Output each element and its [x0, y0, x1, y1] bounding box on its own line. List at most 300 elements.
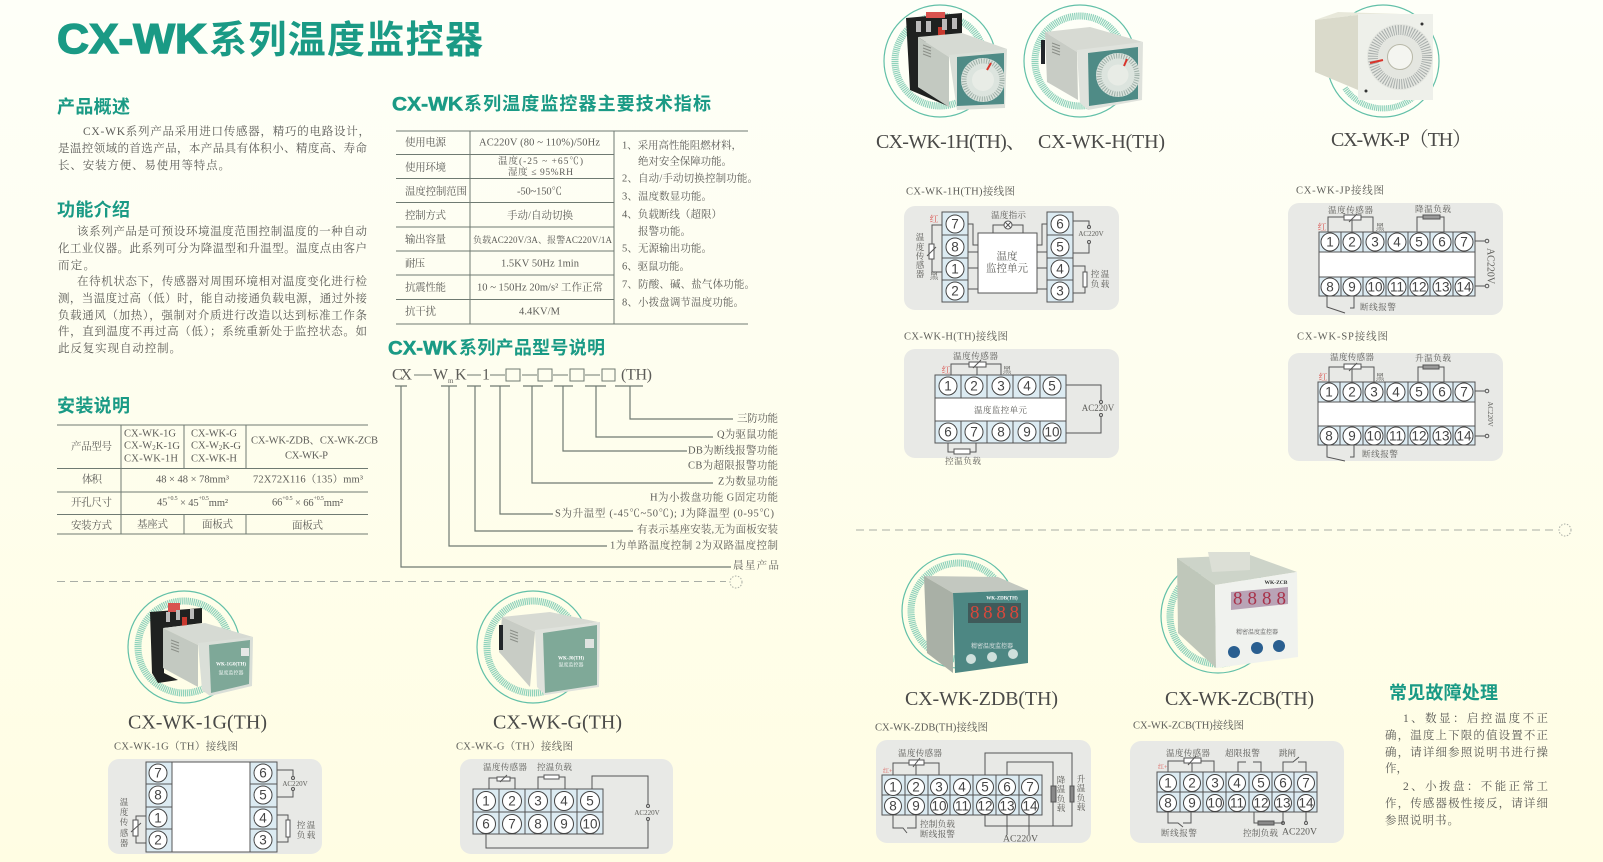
- table: technical specs: 6、驱鼠功能。: [622, 260, 690, 272]
- wiring diagram: ZDB: 载: [1077, 801, 1086, 812]
- heading: model explanation: 系列产品型号说明: [459, 337, 605, 358]
- wiring diagram: 1G: 感: [120, 827, 129, 838]
- wiring diagram: JP: 14: [1456, 280, 1472, 294]
- wiring diagram: 1G: 4: [259, 810, 267, 826]
- wiring diagram: G: 10: [582, 816, 598, 832]
- table: installation: CX-WK-P: [285, 450, 328, 462]
- text block: functions: [58, 224, 368, 355]
- wiring diagram: JP: 断线报警: [1360, 301, 1396, 312]
- wiring diagram: 1H: 8: [951, 240, 959, 254]
- wiring diagram: H: 4: [1023, 378, 1031, 394]
- table: technical specs: 温度(-25 ~ +65℃): [498, 155, 583, 167]
- text block: functions: 此反复实现自动控制。: [58, 341, 181, 355]
- table: installation: 面板式: [292, 518, 324, 532]
- table: installation: +0.5: [313, 496, 324, 502]
- wiring diagram: ZCB: 12: [1253, 796, 1269, 810]
- table: installation: 72X72X116（135）mm³: [253, 474, 363, 486]
- wiring diagram: 1H: 载: [1101, 278, 1110, 289]
- product photo: CX-WK-H: [1024, 5, 1143, 117]
- wiring diagram: 1G: 器: [120, 838, 129, 848]
- model code formula: W: [433, 366, 449, 384]
- wiring diagram: ZCB: 温度传感器: [1166, 747, 1210, 758]
- table: installation: mm²: [324, 498, 343, 508]
- wiring diagram: 1G: 1: [154, 810, 162, 826]
- wiring diagram: 1H: 监控单元: [986, 262, 1028, 274]
- wiring diagram: JP: 黑: [1376, 222, 1385, 232]
- wiring diagram: JP: 1: [1326, 234, 1334, 250]
- wiring diagram: G: 6: [482, 816, 490, 832]
- text block: functions: 测，当温度过高（低）时，能自动接通负载电源，通过外接: [58, 291, 368, 305]
- wiring diagram: SP: 5: [1415, 384, 1423, 400]
- product photo: CX-WK-ZDB: 8888: [970, 602, 1019, 624]
- wiring diagram: 1G: 2: [154, 832, 162, 848]
- wiring diagram: H: 1: [944, 378, 952, 394]
- wiring diagram: H: [904, 349, 1119, 466]
- table: technical specs: 3、温度数显功能。: [622, 190, 712, 202]
- wiring diagram: 1G: 负: [297, 829, 306, 840]
- wiring diagram: 1G: 传: [120, 816, 129, 827]
- product photo: CX-WK-1H: [884, 5, 1007, 117]
- wiring diagram: ZCB: 8: [1164, 796, 1172, 810]
- wiring diagram: SP: [1288, 351, 1503, 461]
- model code legend: H为小拨盘功能 G固定功能: [650, 490, 778, 504]
- wiring diagram: SP: 9: [1348, 428, 1356, 444]
- wiring diagram: 1H: AC220V: [1078, 230, 1104, 238]
- wiring diagram: G: [460, 759, 673, 854]
- table: technical specs: 报警功能。: [638, 224, 691, 238]
- wiring diagram: 1H: [904, 206, 1119, 310]
- heading: model explanation: CX-WK: [388, 338, 457, 360]
- heading: technical specs: [392, 93, 711, 116]
- wiring diagram: 1H: 温: [916, 232, 925, 242]
- table: technical specs: [396, 131, 758, 324]
- text block: product overview: CX-WK系列产品采用进口传感器，精巧的电路设计，: [83, 124, 370, 138]
- table: installation: 66: [272, 498, 282, 508]
- caption: CX-WK-G: CX-WK-G(TH): [493, 712, 622, 734]
- caption: CX-WK-1H / H: CX-WK-1H(TH)、: [876, 131, 1026, 153]
- wiring diagram: ZCB: 跳闸: [1279, 747, 1296, 758]
- table: installation: 2: [219, 444, 223, 452]
- caption: ZDB wiring: CX-WK-ZDB(TH)接线图: [875, 720, 988, 734]
- wiring diagram: ZDB: 12: [977, 798, 993, 814]
- text block: troubleshooting: [1385, 711, 1548, 827]
- table: technical specs: 绝对安全保障功能。: [638, 154, 732, 168]
- product photo: CX-WK-ZCB: WK-ZCB: [1265, 580, 1288, 586]
- wiring diagram: H: 10: [1044, 424, 1060, 440]
- caption: H wiring: CX-WK-H(TH)接线图: [904, 330, 1008, 342]
- wiring diagram: SP: 14: [1456, 428, 1472, 444]
- wiring diagram: H: 6: [944, 424, 952, 440]
- table: installation: K-G: [222, 440, 241, 452]
- product photo: CX-WK-G: [477, 591, 600, 703]
- caption: CX-WK-1G: CX-WK-1G(TH): [128, 712, 267, 734]
- text block: troubleshooting: 确，请详细参照说明书进行操: [1385, 745, 1548, 759]
- wiring diagram: JP: 3: [1371, 234, 1379, 250]
- table: installation: × 45: [178, 498, 199, 508]
- table: technical specs: 使用环境: [405, 160, 446, 174]
- product photo: CX-WK-ZCB: 精密温度监控器: [1236, 628, 1278, 636]
- wiring diagram: ZDB: 9: [912, 798, 920, 814]
- model code legend: 有表示基座安装,无为面板安装: [637, 522, 778, 536]
- wiring diagram: JP: 降温负载: [1415, 203, 1451, 214]
- table: technical specs: 湿度 ≤ 95%RH: [508, 166, 573, 178]
- wiring diagram: ZDB: 14: [1022, 798, 1038, 814]
- wiring diagram: 1G: 5: [259, 788, 267, 802]
- wiring diagram: 1H: 7: [951, 216, 959, 232]
- wiring diagram: ZCB: 14: [1298, 796, 1314, 810]
- wiring diagram: SP: 7: [1460, 384, 1468, 400]
- wiring diagram: SP: 13: [1434, 428, 1450, 444]
- table: installation: mm²: [209, 498, 228, 508]
- product photo: CX-WK-ZDB: WK-ZDB(TH): [986, 596, 1018, 602]
- table: technical specs: 2、自动/手动切换控制功能。: [622, 172, 758, 184]
- model code formula: (TH): [621, 366, 652, 384]
- wiring diagram: SP: 红: [1319, 371, 1328, 382]
- wiring diagram: G: 1: [482, 794, 490, 808]
- model code legend: Q为驱鼠功能: [717, 428, 778, 440]
- table: installation: CX-W: [124, 440, 152, 452]
- wiring diagram: ZDB: 6: [1003, 780, 1011, 794]
- wiring diagram: JP: 2: [1348, 234, 1356, 250]
- wiring diagram: ZDB: AC220V: [1003, 834, 1038, 844]
- table: technical specs: 输出容量: [405, 232, 446, 246]
- wiring diagram: JP: 4: [1393, 234, 1401, 250]
- heading: technical specs: 系列温度监控器主要技术指标: [464, 93, 711, 114]
- table: technical specs: 耐压: [405, 256, 426, 270]
- wiring diagram: ZDB: 10: [931, 798, 947, 814]
- wiring diagram: ZDB: 温: [1077, 783, 1086, 793]
- table: technical specs: 5、无源输出功能。: [622, 242, 712, 254]
- wiring diagram: H: 5: [1048, 378, 1056, 394]
- table: installation: CX-W: [191, 440, 219, 452]
- wiring diagram: G: 8: [534, 816, 542, 832]
- wiring diagram: ZDB: 11: [955, 798, 969, 814]
- model code legend: 1为单路温度控制 2为双路温度控制: [610, 538, 778, 552]
- wiring diagram: ZCB: 控制负载: [1243, 827, 1278, 838]
- wiring diagram: JP: 7: [1460, 234, 1468, 250]
- model code legend: 晨星产品: [733, 558, 779, 572]
- wiring diagram: H: 2: [970, 378, 978, 394]
- wiring diagram: 1G: 载: [307, 829, 316, 840]
- caption: CX-WK-1H / H: [876, 131, 1165, 153]
- table: technical specs: 抗干扰: [405, 304, 436, 318]
- product photo: CX-WK-1G: WK-1G0(TH): [216, 662, 246, 668]
- wiring diagram: ZDB: 降: [1057, 774, 1066, 785]
- wiring diagram: 1H: 器: [916, 269, 925, 279]
- wiring diagram: ZDB: [876, 740, 1091, 844]
- wiring diagram: ZCB: 4: [1233, 776, 1241, 790]
- wiring diagram: JP: 红: [1318, 221, 1327, 232]
- caption: 1G wiring: CX-WK-1G（TH）接线图: [114, 740, 238, 752]
- wiring diagram: JP: 10: [1367, 280, 1383, 294]
- wiring diagram: SP: 2: [1348, 384, 1356, 400]
- wiring diagram: G: 温度传感器: [483, 761, 527, 772]
- wiring diagram: 1H: 6: [1056, 216, 1064, 232]
- wiring diagram: SP: 10: [1366, 428, 1382, 444]
- wiring diagram: SP: 6: [1438, 384, 1446, 400]
- wiring diagram: JP: 11: [1390, 280, 1404, 294]
- table: technical specs: 4.4KV/M: [519, 306, 561, 318]
- model code formula: K: [455, 366, 467, 384]
- wiring diagram: ZDB: 负: [1057, 793, 1066, 804]
- wiring diagram: H: 9: [1023, 424, 1031, 440]
- heading: installation: 安装说明: [57, 396, 130, 416]
- caption: 1H wiring: CX-WK-1H(TH)接线图: [906, 184, 1015, 198]
- wiring diagram: H: 3: [997, 378, 1005, 394]
- wiring diagram: 1H: 温度: [996, 250, 1018, 262]
- wiring diagram: SP: 8: [1325, 428, 1333, 444]
- wiring diagram: 1H: 4: [1056, 262, 1064, 276]
- wiring diagram: 1G: 8: [154, 788, 162, 802]
- wiring diagram: H: 温度传感器: [953, 350, 998, 361]
- wiring diagram: G: 4: [560, 794, 568, 808]
- table: installation: 48 × 48 × 78mm³: [156, 474, 229, 486]
- wiring diagram: ZDB: 升: [1077, 773, 1086, 784]
- wiring diagram: H: 8: [997, 424, 1005, 440]
- wiring diagram: G: 7: [508, 816, 516, 832]
- text block: functions: 件，直到温度不再过高（低）；系统重新处于监控状态。如: [58, 324, 367, 338]
- table: installation: [57, 425, 378, 534]
- wiring diagram: 1G: 温: [307, 820, 316, 830]
- text block: functions: 而定。: [58, 259, 95, 272]
- table: installation: 开孔尺寸: [71, 496, 112, 508]
- caption: SP wiring: CX-WK-SP接线图: [1297, 330, 1388, 342]
- wiring diagram: 1G: 6: [259, 766, 267, 780]
- wiring diagram: JP: 8: [1326, 280, 1334, 294]
- heading: model explanation: [388, 337, 605, 360]
- wiring diagram: ZDB: 1: [889, 780, 897, 794]
- wiring diagram: ZCB: 11: [1230, 796, 1244, 810]
- wiring diagram: SP: 升温负载: [1415, 352, 1451, 363]
- wiring diagram: ZDB: 负: [1077, 792, 1086, 803]
- wiring diagram: 1H: 感: [916, 259, 925, 270]
- table: technical specs: 1.5KV 50Hz 1min: [501, 258, 580, 270]
- table: technical specs: 抗震性能: [405, 280, 446, 294]
- wiring diagram: JP: AC220V: [1484, 248, 1496, 285]
- wiring diagram: ZCB: 断线报警: [1161, 827, 1197, 838]
- wiring diagram: SP: 黑: [1376, 372, 1385, 382]
- table: installation: CX-WK-ZDB、CX-WK-ZCB: [251, 436, 378, 446]
- text block: troubleshooting: 确，温度上下限的值设置不正: [1385, 728, 1548, 742]
- wiring diagram: 1H: 1: [951, 262, 959, 276]
- table: installation: CX-WK-H: [191, 454, 237, 464]
- product photo: CX-WK-1G: 温度监控器: [218, 670, 244, 676]
- wiring diagram: H: 控温负载: [945, 455, 981, 466]
- table: technical specs: 负载AC220V/3A、报警AC220V/1A: [473, 234, 612, 245]
- wiring diagram: JP: 5: [1415, 234, 1423, 250]
- caption: CX-WK-P: CX-WK-P（TH）: [1331, 129, 1472, 151]
- model code legend: [555, 412, 779, 572]
- wiring diagram: ZCB: 红+: [1158, 763, 1168, 771]
- wiring diagram: 1H: 2: [951, 284, 959, 298]
- product photo: CX-WK-G: WK-J0(TH): [558, 656, 584, 662]
- wiring diagram: JP: 温度传感器: [1328, 204, 1373, 215]
- wiring diagram: ZCB: 1: [1164, 776, 1172, 790]
- wiring diagram: 1H: 3: [1056, 284, 1064, 298]
- caption: CX-WK-1H / H: CX-WK-H(TH): [1038, 131, 1165, 153]
- table: installation: 产品型号: [71, 440, 112, 452]
- wiring diagram: ZCB: [1130, 741, 1344, 843]
- text block: troubleshooting: 2、小拨盘：不能正常工: [1403, 779, 1548, 793]
- table: installation: +0.5: [198, 496, 209, 502]
- wiring diagram: ZCB: 3: [1211, 776, 1219, 790]
- wiring diagram: JP: 13: [1434, 280, 1450, 294]
- wiring diagram: G: AC220V: [634, 809, 660, 817]
- wiring diagram: ZDB: 3: [935, 780, 943, 794]
- wiring diagram: JP: [1288, 203, 1503, 315]
- wiring diagram: ZDB: 温: [1057, 784, 1066, 794]
- table: installation: 2: [152, 444, 156, 452]
- caption: ZCB wiring: CX-WK-ZCB(TH)接线图: [1133, 718, 1244, 732]
- product photo: CX-WK-1G: [128, 591, 253, 703]
- wiring diagram: ZDB: 控制负载: [920, 818, 955, 829]
- text block: product overview: 是温控领域的首选产品，本产品具有体积小、精度高、寿命: [58, 141, 368, 155]
- table: installation: +0.5: [167, 496, 178, 502]
- caption: G wiring: CX-WK-G（TH）接线图: [456, 740, 573, 752]
- wiring diagram: JP: 6: [1438, 234, 1446, 250]
- wiring diagram: ZDB: 8: [889, 798, 897, 814]
- wiring diagram: SP: 断线报警: [1362, 448, 1398, 459]
- table: installation: × 66: [293, 498, 314, 508]
- wiring diagram: H: 黑: [1003, 365, 1012, 375]
- text block: product overview: [58, 124, 370, 172]
- wiring diagram: 1G: 控: [297, 819, 306, 830]
- wiring diagram: SP: 1: [1325, 384, 1333, 400]
- table: technical specs: 8、小拨盘调节温度功能。: [622, 296, 744, 308]
- wiring diagram: SP: 12: [1411, 428, 1427, 444]
- table: installation: K-1G: [156, 440, 180, 452]
- table: installation: 体积: [82, 472, 102, 486]
- text block: functions: 化工业仪器。此系列可分为降温型和升温型。温度点由客户: [58, 241, 367, 255]
- table: technical specs: 手动/自动切换: [507, 208, 574, 222]
- product photo: CX-WK-ZCB: [1161, 552, 1298, 673]
- wiring diagram: ZDB: 2: [912, 780, 920, 794]
- wiring diagram: ZCB: 超限报警: [1225, 747, 1260, 758]
- table: installation: 面板式: [202, 518, 234, 530]
- heading: functions: 功能介绍: [57, 200, 130, 220]
- wiring diagram: G: 控温负载: [537, 761, 572, 772]
- table: installation: 45: [157, 498, 167, 508]
- wiring diagram: ZCB: 6: [1279, 776, 1287, 790]
- wiring diagram: 1H: 黑: [930, 271, 939, 281]
- caption: CX-WK-ZCB: CX-WK-ZCB(TH): [1165, 688, 1314, 710]
- wiring diagram: 1H: 传: [916, 250, 925, 261]
- wiring diagram: H: 红: [942, 364, 951, 375]
- table: installation: 基座式: [137, 518, 168, 530]
- wiring diagram: 1G: AC220V: [282, 780, 308, 788]
- product photo: CX-WK-ZDB: [902, 554, 1028, 673]
- heading: product overview: 产品概述: [57, 97, 130, 117]
- model code legend: CB为超限报警功能: [688, 458, 778, 472]
- text block: troubleshooting: 作，: [1385, 762, 1408, 775]
- wiring diagram: ZDB: 7: [1026, 780, 1034, 794]
- table: technical specs: 1、采用高性能阻燃材料，: [622, 138, 742, 152]
- text block: troubleshooting: 1、数显：启控温度不正: [1403, 711, 1548, 725]
- wiring diagram: SP: AC220V: [1486, 401, 1494, 427]
- product photo: CX-WK-ZCB: 8888: [1233, 588, 1286, 610]
- model code legend: DB为断线报警功能: [688, 444, 778, 456]
- wiring diagram: G: 2: [508, 794, 516, 808]
- wiring diagram: 1H: 度: [916, 241, 925, 252]
- model code legend: S为升温型 (-45℃~50℃); J为降温型 (0-95℃): [555, 506, 774, 520]
- wiring diagram: SP: 温度传感器: [1330, 351, 1374, 362]
- product photo: CX-WK-G: 温度监控器: [558, 662, 584, 668]
- product photo: CX-WK-ZDB: 精密温度监控器: [971, 642, 1013, 650]
- table: installation: CX-WK-1H: [124, 454, 178, 464]
- text block: troubleshooting: 作，传感器极性接反，请详细: [1385, 796, 1548, 810]
- wiring diagram: 1G: 7: [154, 766, 162, 780]
- product photo: CX-WK-P: [1315, 5, 1439, 117]
- wiring diagram: G: 3: [534, 794, 542, 808]
- title: [57, 15, 483, 62]
- caption: CX-WK-ZDB: CX-WK-ZDB(TH): [905, 688, 1058, 710]
- wiring diagram: SP: 4: [1392, 384, 1400, 400]
- table: technical specs: 控制方式: [405, 208, 446, 222]
- text block: troubleshooting: 参照说明书。: [1385, 813, 1459, 827]
- wiring diagram: ZDB: 13: [999, 798, 1015, 814]
- text block: functions: 负载通风（加热），强制对介质进行改造以达到标准工作条: [58, 308, 368, 322]
- wiring diagram: 1H: 5: [1056, 240, 1064, 254]
- wiring diagram: ZDB: 5: [981, 780, 989, 794]
- wiring diagram: SP: 11: [1389, 428, 1403, 444]
- table: installation: CX-WK-1G: [124, 428, 176, 440]
- wiring diagram: ZCB: 9: [1188, 796, 1196, 810]
- table: technical specs: 7、防酸、碱、盐气体功能。: [622, 278, 755, 290]
- wiring diagram: ZDB: 温度传感器: [898, 747, 942, 758]
- wiring diagram: JP: 12: [1411, 280, 1427, 294]
- wiring diagram: SP: 3: [1370, 384, 1378, 400]
- table: technical specs: 10 ~ 150Hz 20m/s² 工作正常: [477, 280, 604, 294]
- table: installation: +0.5: [282, 496, 293, 502]
- model code legend: Z为数显功能: [718, 474, 778, 488]
- heading: technical specs: CX-WK: [392, 94, 463, 116]
- model code formula: CX: [392, 366, 412, 384]
- table: installation: 安装方式: [71, 518, 112, 532]
- text block: product overview: 长、安装方便、易使用等特点。: [58, 158, 230, 172]
- title: 系列温度监控器: [209, 20, 483, 62]
- table: technical specs: 温度控制范围: [405, 184, 467, 198]
- wiring diagram: ZCB: AC220V: [1282, 826, 1317, 838]
- model code formula: [392, 366, 652, 385]
- table: technical specs: -50~150℃: [517, 186, 562, 198]
- table: technical specs: 使用电源: [405, 136, 446, 148]
- model code legend: 三防功能: [737, 412, 778, 424]
- text block: functions: 该系列产品是可预设环境温度范围控制温度的一种自动: [77, 224, 368, 238]
- wiring diagram: ZDB: 红+: [883, 767, 893, 775]
- table: installation: CX-WK-G: [191, 428, 237, 440]
- wiring diagram: G: 5: [586, 794, 594, 808]
- model code formula: m: [448, 377, 454, 385]
- table: technical specs: AC220V (80 ~ 110%)/50Hz: [479, 138, 600, 148]
- wiring diagram: ZCB: 7: [1302, 776, 1310, 790]
- model code leader lines: [395, 386, 733, 567]
- wiring diagram: ZCB: 5: [1257, 776, 1265, 790]
- wiring diagram: ZDB: 断线报警: [920, 828, 955, 839]
- wiring diagram: H: AC220V: [1082, 403, 1115, 413]
- wiring diagram: H: 7: [970, 424, 978, 440]
- heading: troubleshooting: 常见故障处理: [1389, 682, 1498, 703]
- table: technical specs: 4、负载断线（超限）: [622, 208, 722, 220]
- wiring diagram: 1H: 控: [1091, 268, 1100, 279]
- wiring diagram: 1G: [108, 759, 322, 854]
- wiring diagram: 1H: 温: [1101, 269, 1110, 279]
- wiring diagram: 1G: 3: [259, 832, 267, 848]
- title: CX-WK: [57, 15, 207, 62]
- wiring diagram: G: 9: [560, 816, 568, 832]
- wiring diagram: H: 温度监控单元: [974, 404, 1027, 415]
- wiring diagram: 1H: 负: [1091, 278, 1100, 289]
- wiring diagram: ZCB: 10: [1207, 796, 1223, 810]
